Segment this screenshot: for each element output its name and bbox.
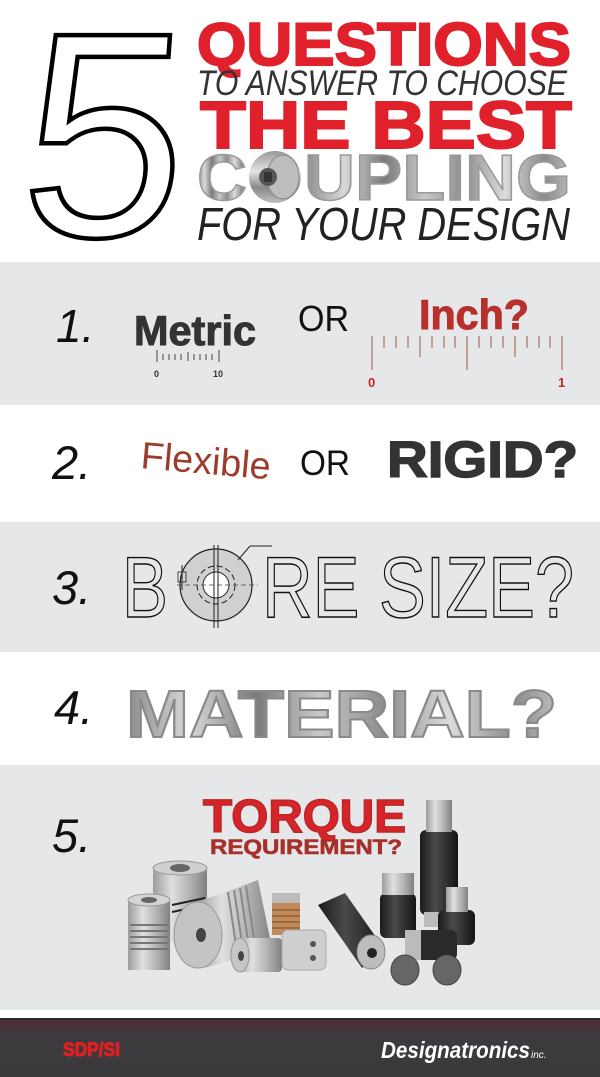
title block	[13, 0, 572, 298]
big lying cylinder	[195, 880, 272, 968]
torque heading: REQUIREMENT?	[210, 836, 402, 859]
title: THE BEST: THE BEST	[200, 88, 572, 163]
row 2: flexible or rigid	[51, 431, 578, 489]
number 4: 4.	[54, 681, 93, 734]
metric ruler	[157, 350, 219, 362]
tall black coupling	[420, 830, 458, 915]
row 1: metric or inch: 1	[558, 375, 565, 390]
right small black	[438, 910, 475, 945]
row 1: metric or inch: 0	[368, 375, 375, 390]
metric label: Metric	[134, 307, 256, 354]
icon: bore drawing	[177, 545, 272, 628]
left bellows	[128, 900, 170, 970]
black jaw coupling lying	[318, 893, 385, 968]
number 5: 5.	[52, 809, 91, 862]
black coupling w/ silver hub	[380, 893, 416, 938]
logo: SDPSI: SDP/SI	[63, 1040, 120, 1061]
inserts	[391, 955, 419, 985]
title: QUESTIONS: QUESTIONS	[197, 11, 571, 78]
inch ruler	[372, 336, 562, 370]
black/silver lying	[405, 930, 457, 960]
number 2: 2.	[51, 436, 91, 489]
OR: OR	[300, 444, 350, 483]
material heading: MATERIAL?	[126, 677, 557, 752]
inch label: Inch?	[419, 291, 529, 338]
OR: OR	[298, 298, 349, 339]
logo: Designatronics: inc.	[531, 1050, 547, 1061]
number 1: 1.	[56, 300, 94, 352]
number 3: 3.	[52, 561, 91, 614]
footer	[0, 1018, 600, 1077]
icon: coupling hub as O	[249, 151, 301, 203]
flexible label: Flexible	[139, 435, 272, 488]
small block couplings	[282, 930, 326, 970]
row 5: torque requirement	[52, 790, 475, 985]
row 3: bore size	[52, 540, 574, 636]
row 1: metric or inch: 0	[154, 369, 159, 379]
torque heading: TORQUE	[203, 790, 406, 842]
row 1: metric or inch: 10	[213, 369, 223, 379]
bore size heading: B	[122, 540, 168, 636]
title: COUPLING	[197, 141, 571, 214]
logo: Designatronics: Designatronics	[381, 1037, 530, 1063]
tall silver cylinder	[153, 868, 207, 942]
copper bellows	[272, 900, 300, 935]
bore size heading	[122, 540, 574, 636]
row 4: material	[54, 677, 557, 752]
row 1: metric or inch	[56, 291, 565, 390]
rigid label: RIGID?	[387, 431, 578, 488]
product photo: assorted couplings	[128, 800, 475, 985]
small slotted coupling	[236, 938, 282, 972]
title: COUPLING: C	[197, 141, 247, 214]
title: COUPLING: UPLING	[304, 141, 571, 214]
